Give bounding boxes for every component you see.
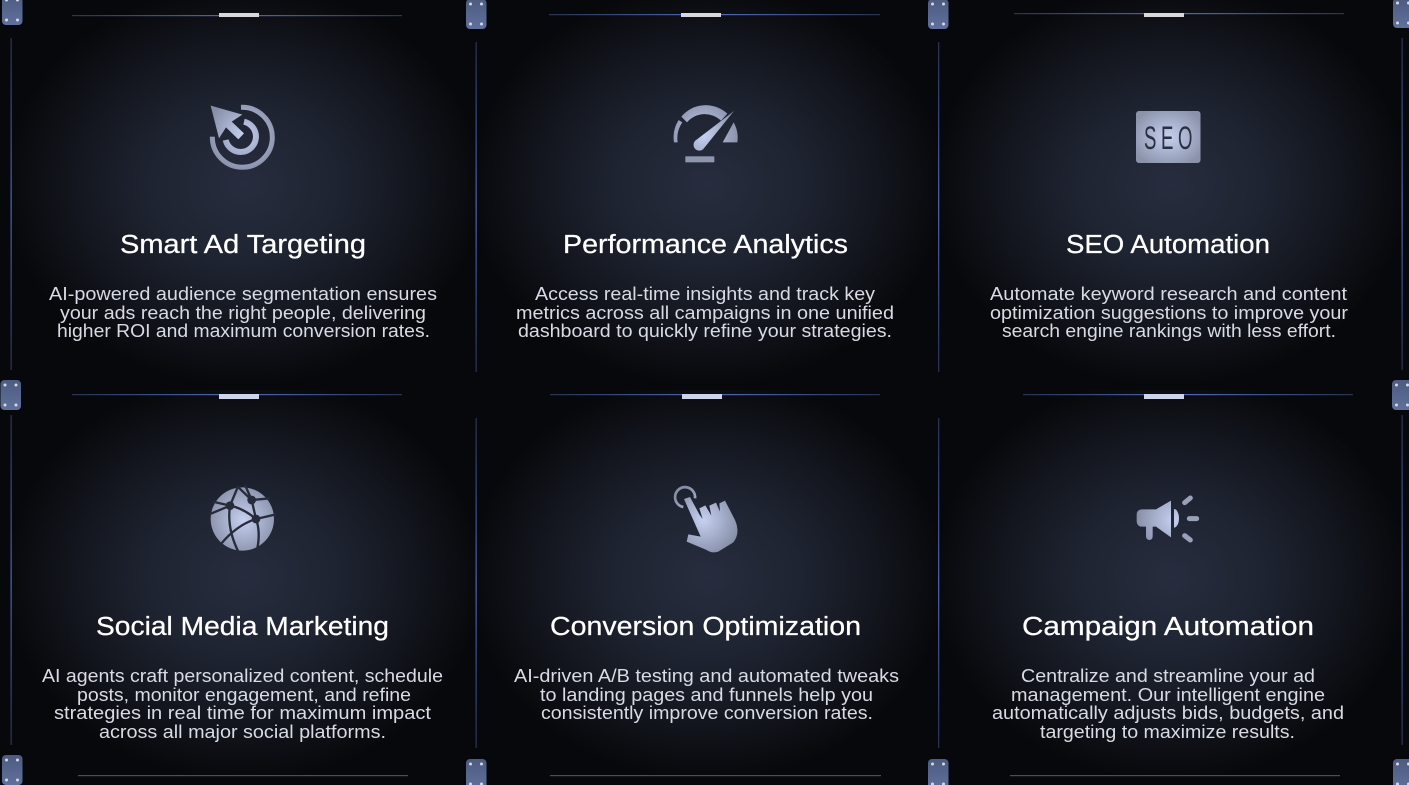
description [42,666,443,742]
description: across all major social platforms. [99,722,386,742]
heading: Performance Analytics [563,231,848,259]
icon: tapping hand [675,487,737,552]
description: Access real-time insights and track key [535,284,875,304]
panel: Smart Ad Targeting [11,0,476,390]
heading: Smart Ad Targeting [120,231,366,259]
description [992,666,1344,742]
icon: speedometer gauge [674,105,738,162]
panel: Performance Analytics [476,0,939,390]
heading: Conversion Optimization [550,613,861,641]
heading: SEO Automation [1066,231,1270,259]
icon: target with arrow [211,106,272,167]
icon: megaphone [1137,498,1197,540]
description: AI-driven A/B testing and automated tweaks [514,666,899,686]
description: to landing pages and funnels help you [540,685,873,705]
icon: network globe [209,485,276,552]
heading: Campaign Automation [1022,613,1314,641]
description: posts, monitor engagement, and refine [77,685,411,705]
description [49,284,437,341]
description: AI agents craft personalized content, schedule [42,666,443,686]
description: higher ROI and maximum conversion rates. [57,321,430,341]
panel: Conversion Optimization [476,390,939,785]
description: search engine rankings with less effort. [1002,321,1336,341]
description: AI-powered audience segmentation ensures [49,284,437,304]
panel: Social Media Marketing [11,390,476,785]
description: targeting to maximize results. [1040,722,1295,742]
description [516,284,894,341]
icon: SEO badge [1136,111,1200,163]
description [514,666,899,723]
icon: SEO badge: SEO [1144,120,1197,156]
description: strategies in real time for maximum impact [54,703,431,723]
description: metrics across all campaigns in one unified [516,303,894,323]
description: Automate keyword research and content [990,284,1347,304]
description: dashboard to quickly refine your strategies. [518,321,892,341]
description: consistently improve conversion rates. [541,703,873,723]
description: automatically adjusts bids, budgets, and [992,703,1344,723]
description [990,284,1348,341]
description: Centralize and streamline your ad [1021,666,1315,686]
panel: SEO Automation [939,0,1402,390]
panel: Campaign Automation [939,390,1402,785]
heading: Social Media Marketing [96,613,389,641]
description: optimization suggestions to improve your [990,303,1348,323]
description: management. Our intelligent engine [1011,685,1325,705]
description: your ads reach the right people, delivering [60,303,426,323]
